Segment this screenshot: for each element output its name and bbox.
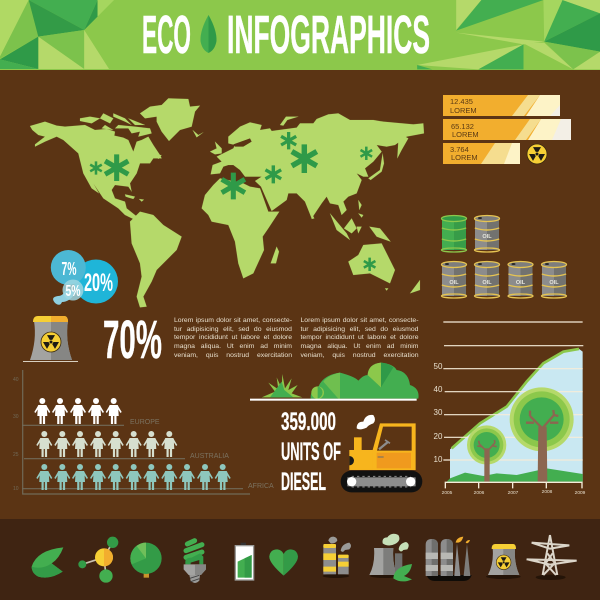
- text block: left column: [174, 317, 292, 359]
- smoke bubbles: 7%: [62, 259, 76, 279]
- region labels: EUROPE: [130, 419, 160, 426]
- icon: tree: [130, 543, 162, 578]
- oil barrel: OIL: [449, 280, 459, 286]
- Australia: [348, 243, 395, 283]
- Baltic sea: [233, 138, 252, 147]
- chart y labels: 20: [434, 432, 443, 441]
- bar: 65.132: 65.132: [451, 122, 474, 131]
- bushes: [311, 363, 419, 399]
- row: Europe: [34, 398, 122, 424]
- smoke bubbles: 20%: [84, 269, 113, 297]
- icon: heart: [269, 549, 298, 576]
- Kamchatka: [397, 136, 408, 158]
- Caribbean: [125, 194, 144, 202]
- text block: left column: Lorem ipsum dolor sit amet, consecte-: [174, 317, 292, 324]
- chart axes: [22, 370, 250, 494]
- chart x labels: 2007: [508, 490, 519, 496]
- footer icons left: [32, 537, 298, 583]
- chart area: [450, 348, 583, 482]
- stat: 359.000 units of diesel: UNITS OF: [281, 438, 341, 466]
- icon: leaf: [32, 547, 63, 578]
- bar: 12.435: [443, 95, 560, 116]
- New Zealand: [385, 280, 420, 293]
- Sri Lanka and Philippines: [312, 200, 363, 219]
- title: ECO: [142, 5, 191, 65]
- axis labels: 40: [13, 377, 19, 383]
- chart y labels: 40: [434, 385, 443, 394]
- green barrel: [442, 216, 466, 252]
- text block: left column: tur adipisicing elit, sed do eiusmod: [174, 326, 292, 333]
- footer icons right: [323, 534, 577, 581]
- axis labels: 10: [13, 486, 19, 492]
- axis labels: [13, 377, 19, 492]
- bar: 12.435: 12.435: [450, 97, 473, 106]
- text block: right column: tur adipisicing elit, sed do eiusmod: [300, 326, 418, 333]
- footer band: [0, 519, 600, 600]
- text block: right column: magna aliqua. Ut enim ad minim: [300, 343, 418, 350]
- chart x labels: 2008: [542, 489, 553, 495]
- North America: [30, 98, 203, 219]
- bushes and grass: [250, 363, 419, 401]
- oil barrel: OIL: [549, 280, 559, 286]
- oil barrel: OIL: [516, 280, 526, 286]
- bar: 65.132: LOREM: [452, 130, 479, 139]
- icon: molecule: [78, 537, 118, 583]
- text block: right column: tempor incididunt ut labore et dolore: [300, 334, 418, 341]
- row: Africa: [36, 464, 231, 490]
- bar: 3.764: LOREM: [451, 153, 478, 162]
- smoke bubbles: 5%: [66, 283, 80, 300]
- stat: 359.000 units of diesel: DIESEL: [281, 468, 326, 496]
- icon: bulldozer: [341, 415, 422, 492]
- Eurasia: [211, 113, 424, 218]
- axis labels: 30: [13, 414, 19, 420]
- text block: right column: Lorem ipsum dolor sit amet, consecte-: [300, 317, 418, 324]
- world map: [30, 98, 424, 307]
- smoke bubbles: [51, 250, 118, 305]
- people chart: [13, 370, 274, 494]
- stat: 359.000 units of diesel: [281, 408, 341, 496]
- x axis: [445, 482, 582, 488]
- markers: asterisks: [90, 132, 375, 271]
- bar: 12.435: LOREM: [450, 106, 477, 115]
- text block: left column: veniam, quis nostrud exercitation: [174, 352, 292, 359]
- region labels: [130, 419, 274, 490]
- hills: [447, 468, 583, 482]
- chart x labels: 2009: [575, 490, 586, 496]
- header polygon pattern: [0, 0, 600, 69]
- chart y labels: 10: [434, 455, 443, 464]
- icon: nuclear cooling tower: [23, 316, 78, 362]
- Greenland: [140, 98, 200, 141]
- Iceland: [193, 130, 203, 137]
- bar: 65.132: [443, 119, 571, 140]
- icon: light bulb: [184, 541, 206, 583]
- icon: electricity pylon: [527, 535, 577, 580]
- chart x labels: [442, 489, 586, 496]
- large tree: [510, 387, 574, 482]
- icon: title leaf: [200, 15, 217, 53]
- Novaya Zemlya: [280, 117, 298, 126]
- UK and Ireland: [210, 142, 222, 154]
- icon: power plant with leaf: [369, 534, 412, 581]
- grid lines: [443, 322, 583, 460]
- stat: 70%: 70%: [103, 310, 162, 370]
- title: [142, 5, 430, 65]
- header banner: [0, 0, 600, 70]
- Africa: [202, 178, 279, 278]
- New Guinea: [369, 227, 391, 242]
- row: Australia: [36, 431, 177, 457]
- text block: left column: tempor incididunt ut labore et dolore: [174, 334, 292, 341]
- Arctic islands: [80, 113, 162, 159]
- Sumatra and Malaya: [330, 213, 350, 240]
- oil barrel: OIL: [482, 280, 492, 286]
- icon: radiation badge: [527, 144, 547, 164]
- region labels: AUSTRALIA: [190, 453, 229, 460]
- grass tuft: [262, 374, 302, 397]
- chart x labels: 2006: [474, 490, 485, 496]
- bar: 3.764: [443, 143, 520, 164]
- chart x labels: 2005: [442, 490, 453, 496]
- small tree: [467, 425, 506, 482]
- bar: 3.764: 3.764: [450, 145, 469, 154]
- chart y labels: [434, 362, 443, 464]
- icon: nuclear tower: [486, 544, 521, 579]
- Japan: [368, 153, 384, 180]
- South America: [130, 212, 182, 307]
- Madagascar: [271, 247, 279, 263]
- chart y labels: 30: [434, 408, 443, 417]
- barrels: [442, 216, 566, 298]
- text block: right column: veniam, quis nostrud exercitation: [300, 352, 418, 359]
- oil barrel: OIL: [482, 234, 492, 240]
- text block: right column: [300, 317, 418, 359]
- text block: left column: magna aliqua. Ut enim ad minim: [174, 343, 292, 350]
- chart y labels: 50: [434, 362, 443, 371]
- icon: battery: [235, 543, 254, 580]
- icon: factory chimneys: [323, 537, 351, 578]
- stat: 359.000 units of diesel: 359.000: [281, 408, 336, 436]
- axis labels: 25: [13, 452, 19, 458]
- area chart with trees: [443, 322, 583, 488]
- Borneo and Sulawesi: [344, 218, 362, 233]
- icon: refinery towers: [426, 537, 472, 581]
- region labels: AFRICA: [248, 483, 274, 490]
